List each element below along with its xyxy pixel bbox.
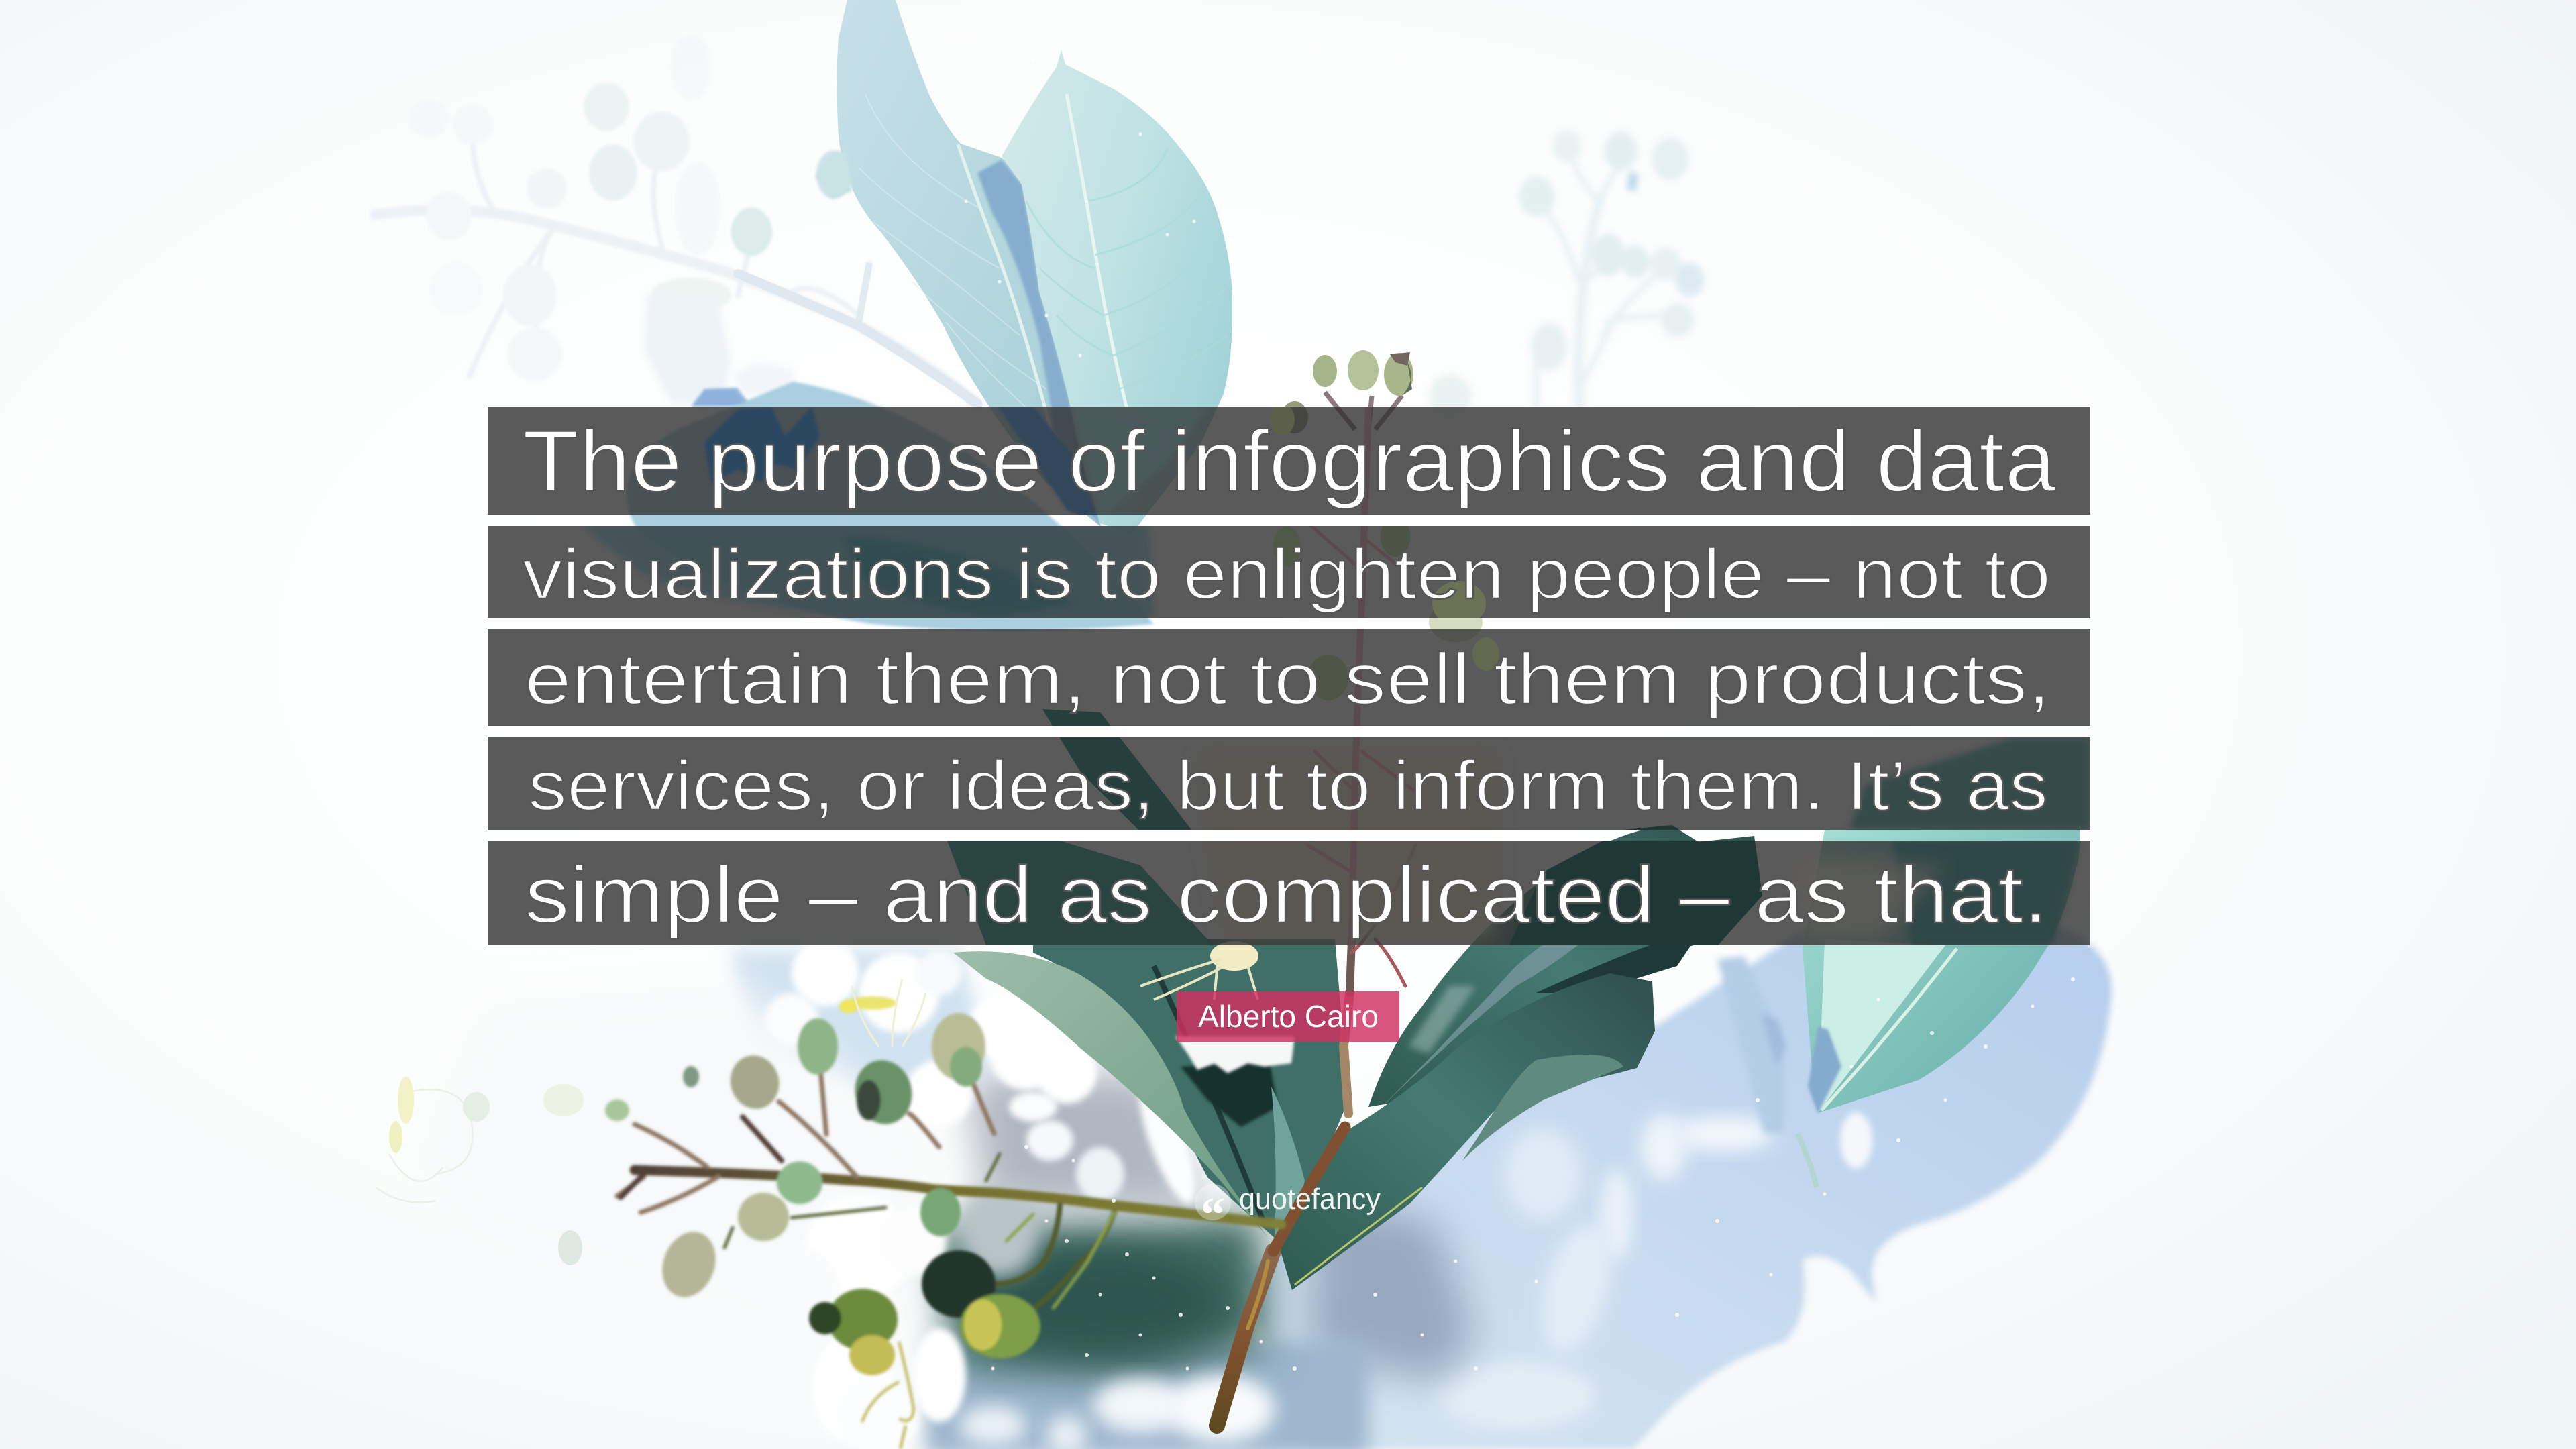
plant showing through the bars: [584, 403, 2090, 945]
lower right dark leaf: [1278, 973, 1655, 1290]
top bud cluster: [1281, 350, 1483, 642]
quote panel: [488, 403, 2090, 945]
quotefancy logo: “: [1201, 1187, 1225, 1241]
cream flower above author label: [1140, 941, 1258, 1000]
dark blurred foliage at bottom centre: [926, 1071, 1368, 1449]
quote text: [523, 412, 2057, 940]
top leaf, left: [837, 0, 1101, 527]
line 2: visualizations is to enlighten people – not to: [523, 535, 2051, 614]
pale blue blossom above first bar: [644, 150, 869, 407]
line 4: services, or ideas, but to inform them. It’s as: [528, 747, 2048, 825]
author label: [1177, 991, 1399, 1042]
top leaf, right: [815, 50, 1232, 534]
grey-blue shadow mass below the stem: [1308, 1194, 1476, 1382]
line 1: The purpose of infographics and data: [523, 412, 2057, 510]
line 3: entertain them, not to sell them products,: [525, 638, 2051, 719]
blue leaf shadow, lower right: [1241, 926, 2112, 1449]
thin branch crossing the top leaf: [738, 274, 977, 404]
pale flower and blue backdrop, lower left: [376, 939, 1097, 1449]
large pale green leaf: [953, 951, 1269, 1238]
line 5: simple – and as complicated – as that.: [525, 850, 2048, 940]
speckles: [965, 59, 2075, 1371]
faint branch and buds, upper left: [376, 34, 977, 404]
faint plant, upper right: [1429, 130, 1705, 417]
stem: [1217, 845, 1415, 1426]
flowering branch: [605, 1013, 1281, 1449]
quote bars: [488, 407, 2090, 945]
author label: Alberto Cairo: [1198, 999, 1379, 1034]
quotefancy logo: [1195, 1183, 1381, 1241]
dark teal leaf behind the pale leaf: [1033, 939, 1348, 1241]
blue leaf under the bars, left of stem: [627, 382, 1154, 631]
right pale teal leaf: [1717, 830, 2080, 1187]
quotefancy logo: quotefancy: [1239, 1183, 1381, 1216]
white flower under author label: [1175, 1036, 1295, 1073]
upper right dark leaf: [1368, 825, 1762, 1107]
